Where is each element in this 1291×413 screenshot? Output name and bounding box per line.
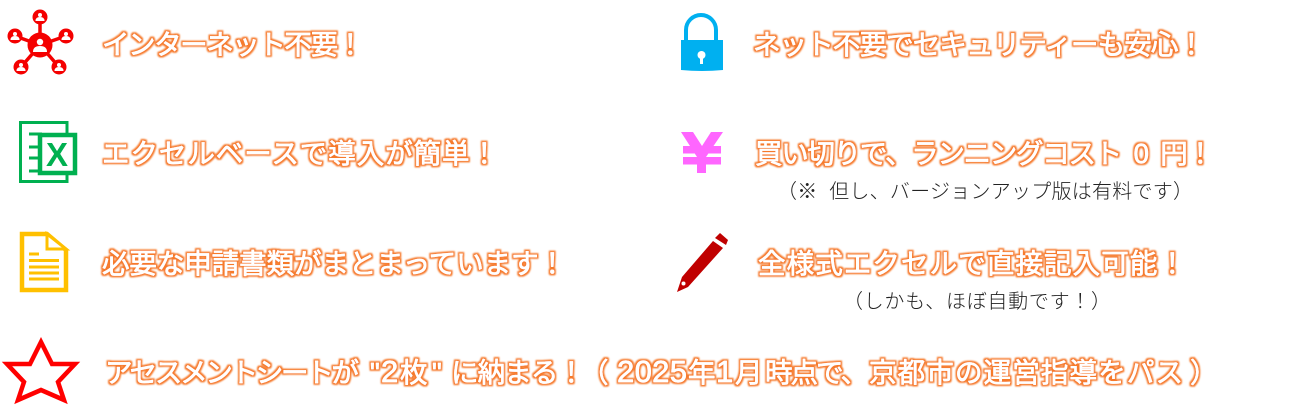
heading: documents included: 必要な申請書類がまとまっています！ [102, 248, 566, 279]
heading: assessment sheet: 枚 [400, 357, 428, 388]
icon: padlock [681, 15, 723, 71]
heading: excel based: エクセルベースで導入が簡単！ [102, 138, 498, 169]
note: version upgrade is paid: （※ 但し、バージョンアップ版は有料です） [777, 180, 1193, 203]
heading: assessment sheet: （ [581, 357, 608, 388]
heading: assessment sheet: 京都市の運営指導をパス [869, 357, 1183, 388]
heading: assessment sheet: " [370, 357, 380, 388]
heading: assessment sheet: アセスメントシートが [105, 357, 359, 388]
heading: no internet needed: インターネット不要！ [102, 29, 364, 60]
icon: yen sign [681, 132, 723, 173]
icon: excel notebook [20, 122, 75, 182]
icon: excel notebook: X [46, 136, 68, 173]
icon: star [7, 342, 75, 400]
heading: assessment sheet: 年 [688, 357, 716, 388]
note: almost automatic: （しかも、ほぼ自動です！） [843, 290, 1111, 313]
heading: assessment sheet: 時点で、 [765, 357, 868, 388]
heading: direct entry: 全様式エクセルで直接記入可能！ [758, 248, 1186, 279]
heading: flat purchase: 買い切りで、ランニングコスト 0 円！ [755, 138, 1214, 169]
heading: secure without network: ネット不要でセキュリティーも安心！ [753, 29, 1205, 60]
heading: assessment sheet: " [432, 357, 442, 388]
icon: pencil [677, 233, 728, 292]
icon: network of people [8, 10, 74, 74]
heading: assessment sheet: 1 [716, 354, 733, 389]
heading: assessment sheet: 2 [381, 354, 398, 389]
heading: assessment sheet: 月 [735, 357, 762, 388]
heading: assessment sheet: に納まる！ [451, 357, 585, 388]
icon: document [22, 234, 66, 290]
heading: assessment sheet [105, 354, 1218, 389]
heading: assessment sheet: 2025 [617, 354, 687, 389]
heading: assessment sheet: ） [1190, 357, 1218, 388]
